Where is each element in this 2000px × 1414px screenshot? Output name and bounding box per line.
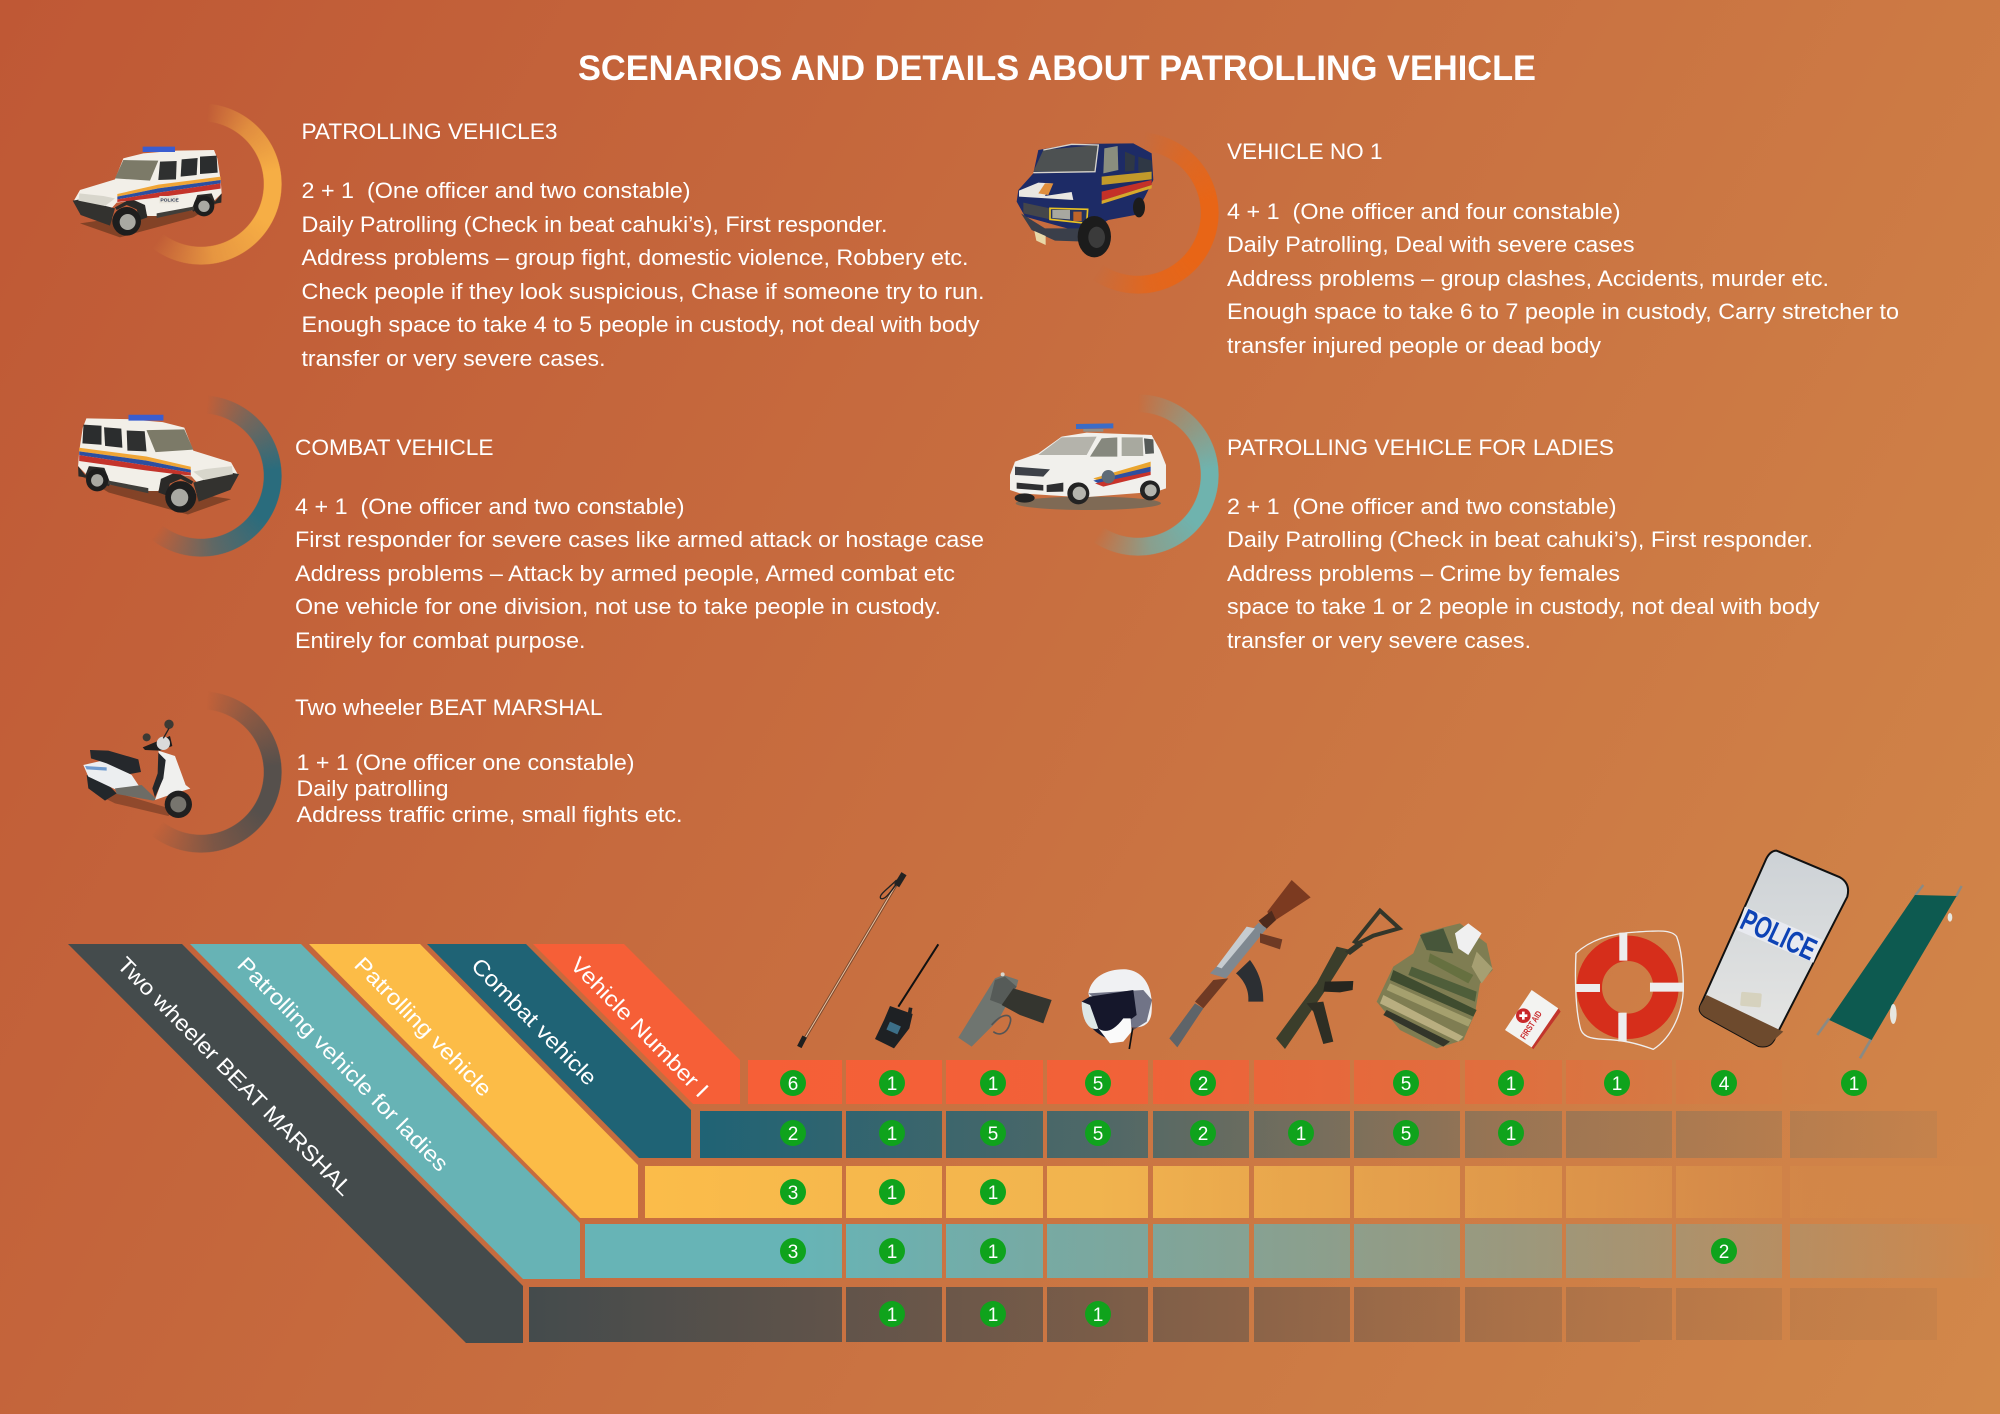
icon: white police car — [1010, 423, 1166, 510]
details text: 4 + 1 (One officer and four constable) — [1227, 199, 1620, 224]
panel: patrolling vehicle 3 — [73, 103, 984, 371]
details text — [296, 750, 682, 827]
count badges: 1 — [887, 1124, 897, 1145]
count badges: 5 — [1401, 1074, 1411, 1095]
details text: transfer or very severe cases. — [302, 346, 606, 371]
details text: Daily Patrolling (Check in beat cahuki’s), First responder. — [1227, 527, 1813, 552]
count badges — [780, 1238, 1737, 1264]
details text: Address traffic crime, small fights etc. — [296, 802, 682, 827]
heading: COMBAT VEHICLE — [295, 435, 494, 460]
count badges: 2 — [788, 1124, 798, 1145]
count badges — [879, 1301, 1111, 1327]
count badges: 1 — [887, 1242, 897, 1263]
equipment icons row — [799, 851, 1962, 1058]
legend band: combat vehicle: Combat vehicle — [466, 953, 602, 1090]
count badges — [780, 1070, 1867, 1096]
icon: helmet — [1082, 969, 1152, 1049]
count badges: 5 — [1093, 1124, 1103, 1145]
legend band: patrolling vehicle for ladies: Patrolling vehicle for ladies — [232, 952, 454, 1176]
count badges: 5 — [1401, 1124, 1411, 1145]
panel: patrolling vehicle for ladies — [1010, 394, 1820, 653]
icon: first aid kit: FIRST AID — [1518, 1009, 1544, 1041]
count badges: 2 — [1198, 1074, 1208, 1095]
count badges: 5 — [1093, 1074, 1103, 1095]
count badges: 1 — [988, 1305, 998, 1326]
icon: baton — [799, 874, 904, 1047]
icon: bulletproof vest — [1377, 923, 1493, 1048]
details text: space to take 1 or 2 people in custody, not deal with body — [1227, 594, 1820, 619]
panel: vehicle no 1 — [1017, 132, 1899, 358]
table row: combat vehicle — [700, 1111, 1937, 1158]
details text: Enough space to take 6 to 7 people in custody, Carry stretcher to — [1227, 299, 1899, 324]
details text — [1227, 199, 1899, 358]
details text: Daily Patrolling (Check in beat cahuki’s), First responder. — [302, 212, 888, 237]
details text: Address problems – Attack by armed people, Armed combat etc — [295, 561, 955, 586]
details text: Daily patrolling — [296, 776, 448, 801]
count badges: 1 — [1506, 1074, 1516, 1095]
panel: combat vehicle — [78, 395, 984, 653]
icon: scooter — [83, 720, 192, 818]
ring: dark teal — [156, 396, 282, 557]
count badges: 1 — [988, 1074, 998, 1095]
heading: Two wheeler BEAT MARSHAL — [295, 695, 602, 720]
details text: 2 + 1 (One officer and two constable) — [302, 178, 690, 203]
count badges: 1 — [887, 1305, 897, 1326]
panel: two wheeler beat marshal — [83, 691, 682, 855]
legend band: patrolling vehicle — [309, 944, 638, 1218]
legend band: patrolling vehicle: Patrolling vehicle — [349, 952, 497, 1101]
icon: stretcher — [1817, 885, 1962, 1058]
icon: police riot shield: POLICE — [1735, 903, 1822, 967]
icon: lifebuoy — [1575, 931, 1684, 1049]
legend band: vehicle number i: Vehicle Number I — [565, 952, 714, 1102]
icon: combat jeep — [78, 415, 239, 514]
count badges: 1 — [887, 1074, 897, 1095]
icon: submachine gun — [1276, 911, 1399, 1049]
count badges: 3 — [788, 1183, 798, 1204]
ring: teal — [1099, 396, 1219, 556]
details text: Address problems – group clashes, Accidents, murder etc. — [1227, 266, 1829, 291]
icon: ak rifle — [1169, 880, 1311, 1047]
icon: police jeep: POLICE — [160, 198, 180, 204]
count badges: 6 — [788, 1074, 798, 1095]
details text — [295, 494, 984, 653]
legend band: combat vehicle — [427, 944, 691, 1158]
details text — [302, 178, 984, 371]
details text: One vehicle for one division, not use to take people in custody. — [295, 594, 941, 619]
icon: pistol — [958, 972, 1052, 1047]
count badges: 4 — [1719, 1074, 1730, 1095]
table row: patrolling vehicle for ladies — [585, 1224, 1995, 1278]
details text: transfer injured people or dead body — [1227, 333, 1602, 358]
details text: Address problems – group fight, domestic violence, Robbery etc. — [302, 245, 968, 270]
count badges: 1 — [988, 1242, 998, 1263]
count badges: 1 — [1612, 1074, 1622, 1095]
table row: two wheeler beat marshal — [529, 1287, 1937, 1342]
count badges: 1 — [1093, 1305, 1103, 1326]
count badges: 1 — [988, 1183, 998, 1204]
title: SCENARIOS AND DETAILS ABOUT PATROLLING VEHICLE — [578, 49, 1536, 88]
details text: First responder for severe cases like armed attack or hostage case — [295, 527, 984, 552]
icon: first aid kit — [1505, 990, 1561, 1049]
details text: Check people if they look suspicious, Chase if someone try to run. — [302, 279, 984, 304]
table row: vehicle number i — [748, 1060, 1937, 1104]
count badges: 2 — [1198, 1124, 1208, 1145]
details text: 4 + 1 (One officer and two constable) — [295, 494, 684, 519]
heading: VEHICLE NO 1 — [1227, 139, 1382, 164]
count badges: 5 — [988, 1124, 998, 1145]
count badges: 2 — [1719, 1242, 1729, 1263]
ring: charcoal — [158, 693, 282, 853]
count badges: 1 — [1296, 1124, 1306, 1145]
details text: 2 + 1 (One officer and two constable) — [1227, 494, 1616, 519]
icon: police riot shield — [1700, 851, 1848, 1046]
legend band: patrolling vehicle for ladies — [190, 944, 580, 1279]
icon: walkie talkie — [875, 944, 938, 1048]
legend band: vehicle number i — [533, 944, 740, 1104]
details text: Daily Patrolling, Deal with severe cases — [1227, 232, 1634, 257]
icon: police jeep — [73, 147, 222, 237]
details text: Entirely for combat purpose. — [295, 628, 586, 653]
count badges: 1 — [887, 1183, 897, 1204]
heading: PATROLLING VEHICLE3 — [302, 119, 558, 144]
details text: 1 + 1 (One officer one constable) — [296, 750, 634, 775]
legend band: two wheeler beat marshal: Two wheeler BEAT MARSHAL — [112, 952, 357, 1201]
count badges — [780, 1179, 1006, 1205]
count badges — [780, 1120, 1524, 1146]
count badges: 3 — [788, 1242, 798, 1263]
count badges: 1 — [1506, 1124, 1516, 1145]
legend band: two wheeler beat marshal — [68, 944, 523, 1343]
count badges: 1 — [1849, 1074, 1859, 1095]
details text: Address problems – Crime by females — [1227, 561, 1620, 586]
details text: transfer or very severe cases. — [1227, 628, 1531, 653]
details text: Enough space to take 4 to 5 people in custody, not deal with body — [302, 312, 980, 337]
ring: yellow — [160, 105, 282, 265]
heading: PATROLLING VEHICLE FOR LADIES — [1227, 435, 1614, 460]
table row: patrolling vehicle — [645, 1166, 2000, 1218]
details text — [1227, 494, 1820, 653]
ring: orange — [1106, 136, 1219, 294]
icon: police van — [1017, 143, 1153, 257]
